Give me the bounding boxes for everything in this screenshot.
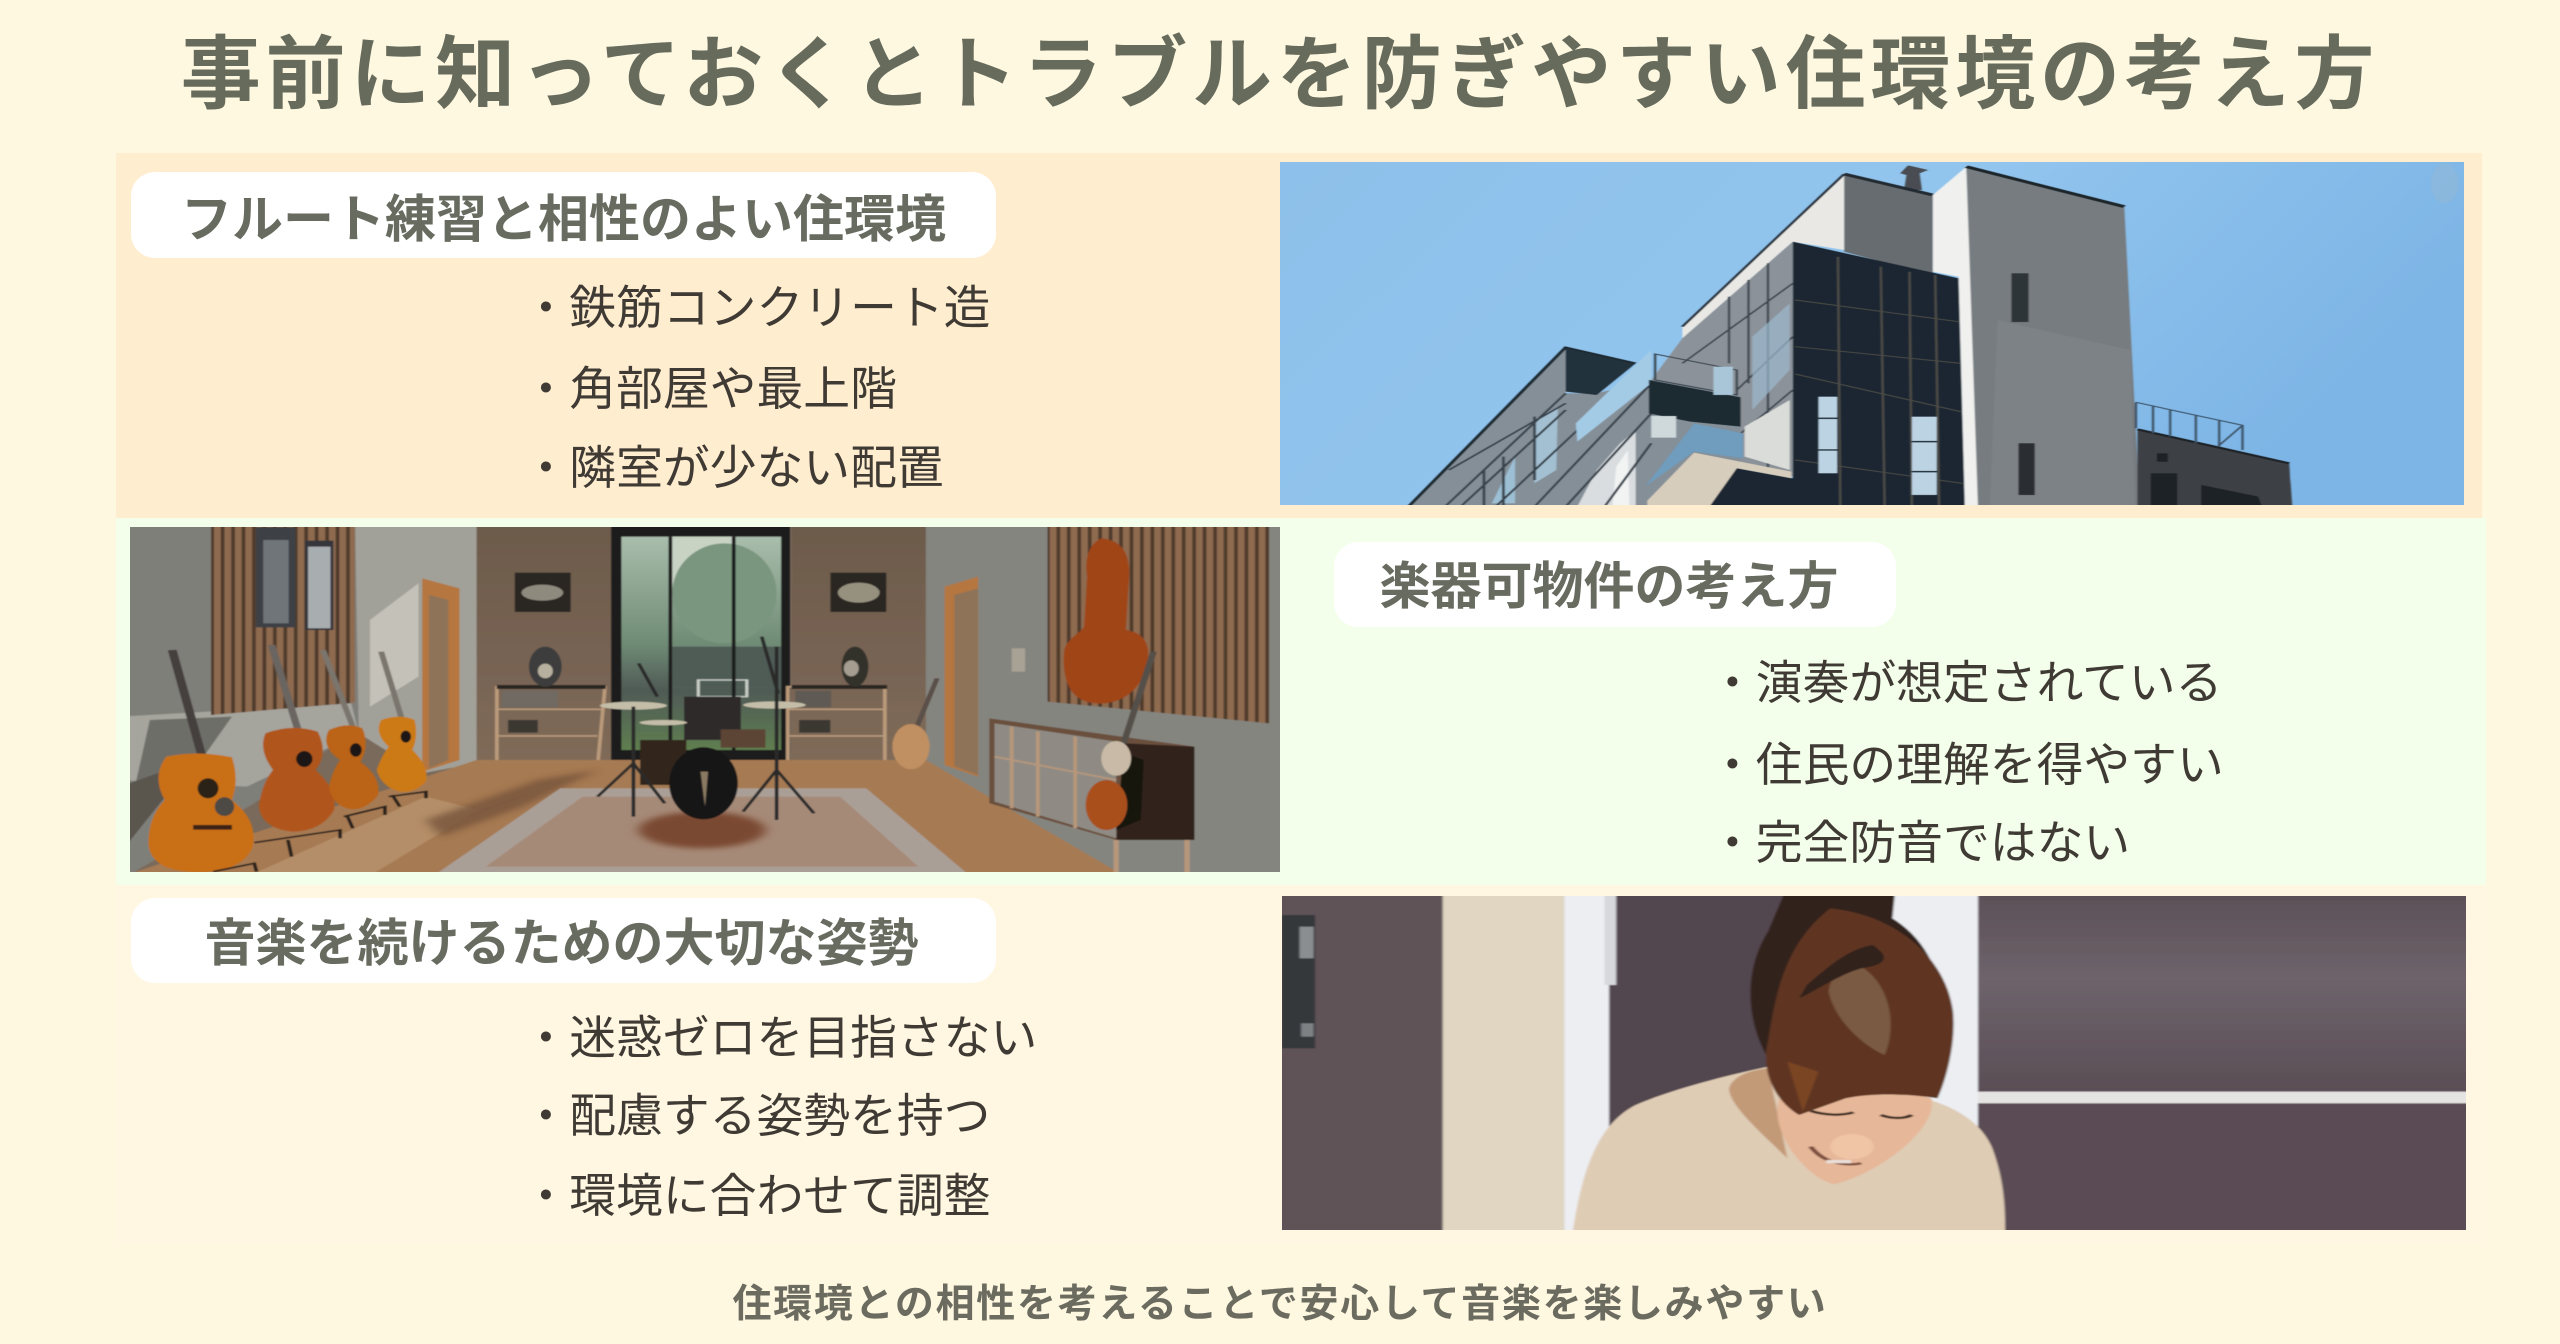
panel: 音楽を続けるための大切な姿勢	[116, 885, 2486, 1245]
photo: woman bowing at a door	[1282, 896, 2466, 1230]
heading: フルート練習と相性のよい住環境: フルート練習と相性のよい住環境	[181, 191, 946, 248]
bullet list: attitude points: ・迷惑ゼロを目指さない	[522, 1012, 1037, 1064]
panel: フルート練習と相性のよい住環境	[116, 153, 2482, 518]
photo: concrete apartment building	[1280, 162, 2464, 505]
heading: 音楽を続けるための大切な姿勢	[131, 898, 996, 983]
panel: 楽器可物件の考え方	[116, 518, 2486, 885]
photo: music room with guitars and drum kit	[130, 527, 1280, 872]
footer message: 住環境との相性を考えることで安心して音楽を楽しみやすい	[732, 1283, 1828, 1326]
heading: フルート練習と相性のよい住環境	[131, 172, 996, 258]
bullet list: instrument-friendly properties: ・完全防音ではない	[1709, 817, 2130, 869]
heading: 楽器可物件の考え方: 楽器可物件の考え方	[1379, 558, 1838, 614]
bullet list: attitude points: ・配慮する姿勢を持つ	[522, 1090, 990, 1142]
bullet list: residential conditions: ・隣室が少ない配置	[522, 442, 944, 494]
bullet list: attitude points	[522, 1012, 1037, 1222]
bullet list: residential conditions: ・鉄筋コンクリート造	[522, 282, 990, 334]
bullet list: residential conditions: ・角部屋や最上階	[522, 363, 897, 415]
bullet list: attitude points: ・環境に合わせて調整	[522, 1170, 990, 1222]
bullet list: residential conditions	[522, 282, 990, 494]
bullet list: instrument-friendly properties	[1709, 657, 2224, 869]
bullet list: instrument-friendly properties: ・住民の理解を得やすい	[1709, 739, 2224, 791]
title: 事前に知っておくとトラブルを防ぎやすい住環境の考え方	[181, 30, 2379, 119]
bullet list: instrument-friendly properties: ・演奏が想定されている	[1709, 657, 2222, 709]
heading: 音楽を続けるための大切な姿勢: 音楽を続けるための大切な姿勢	[204, 914, 918, 972]
heading: 楽器可物件の考え方	[1334, 542, 1896, 627]
